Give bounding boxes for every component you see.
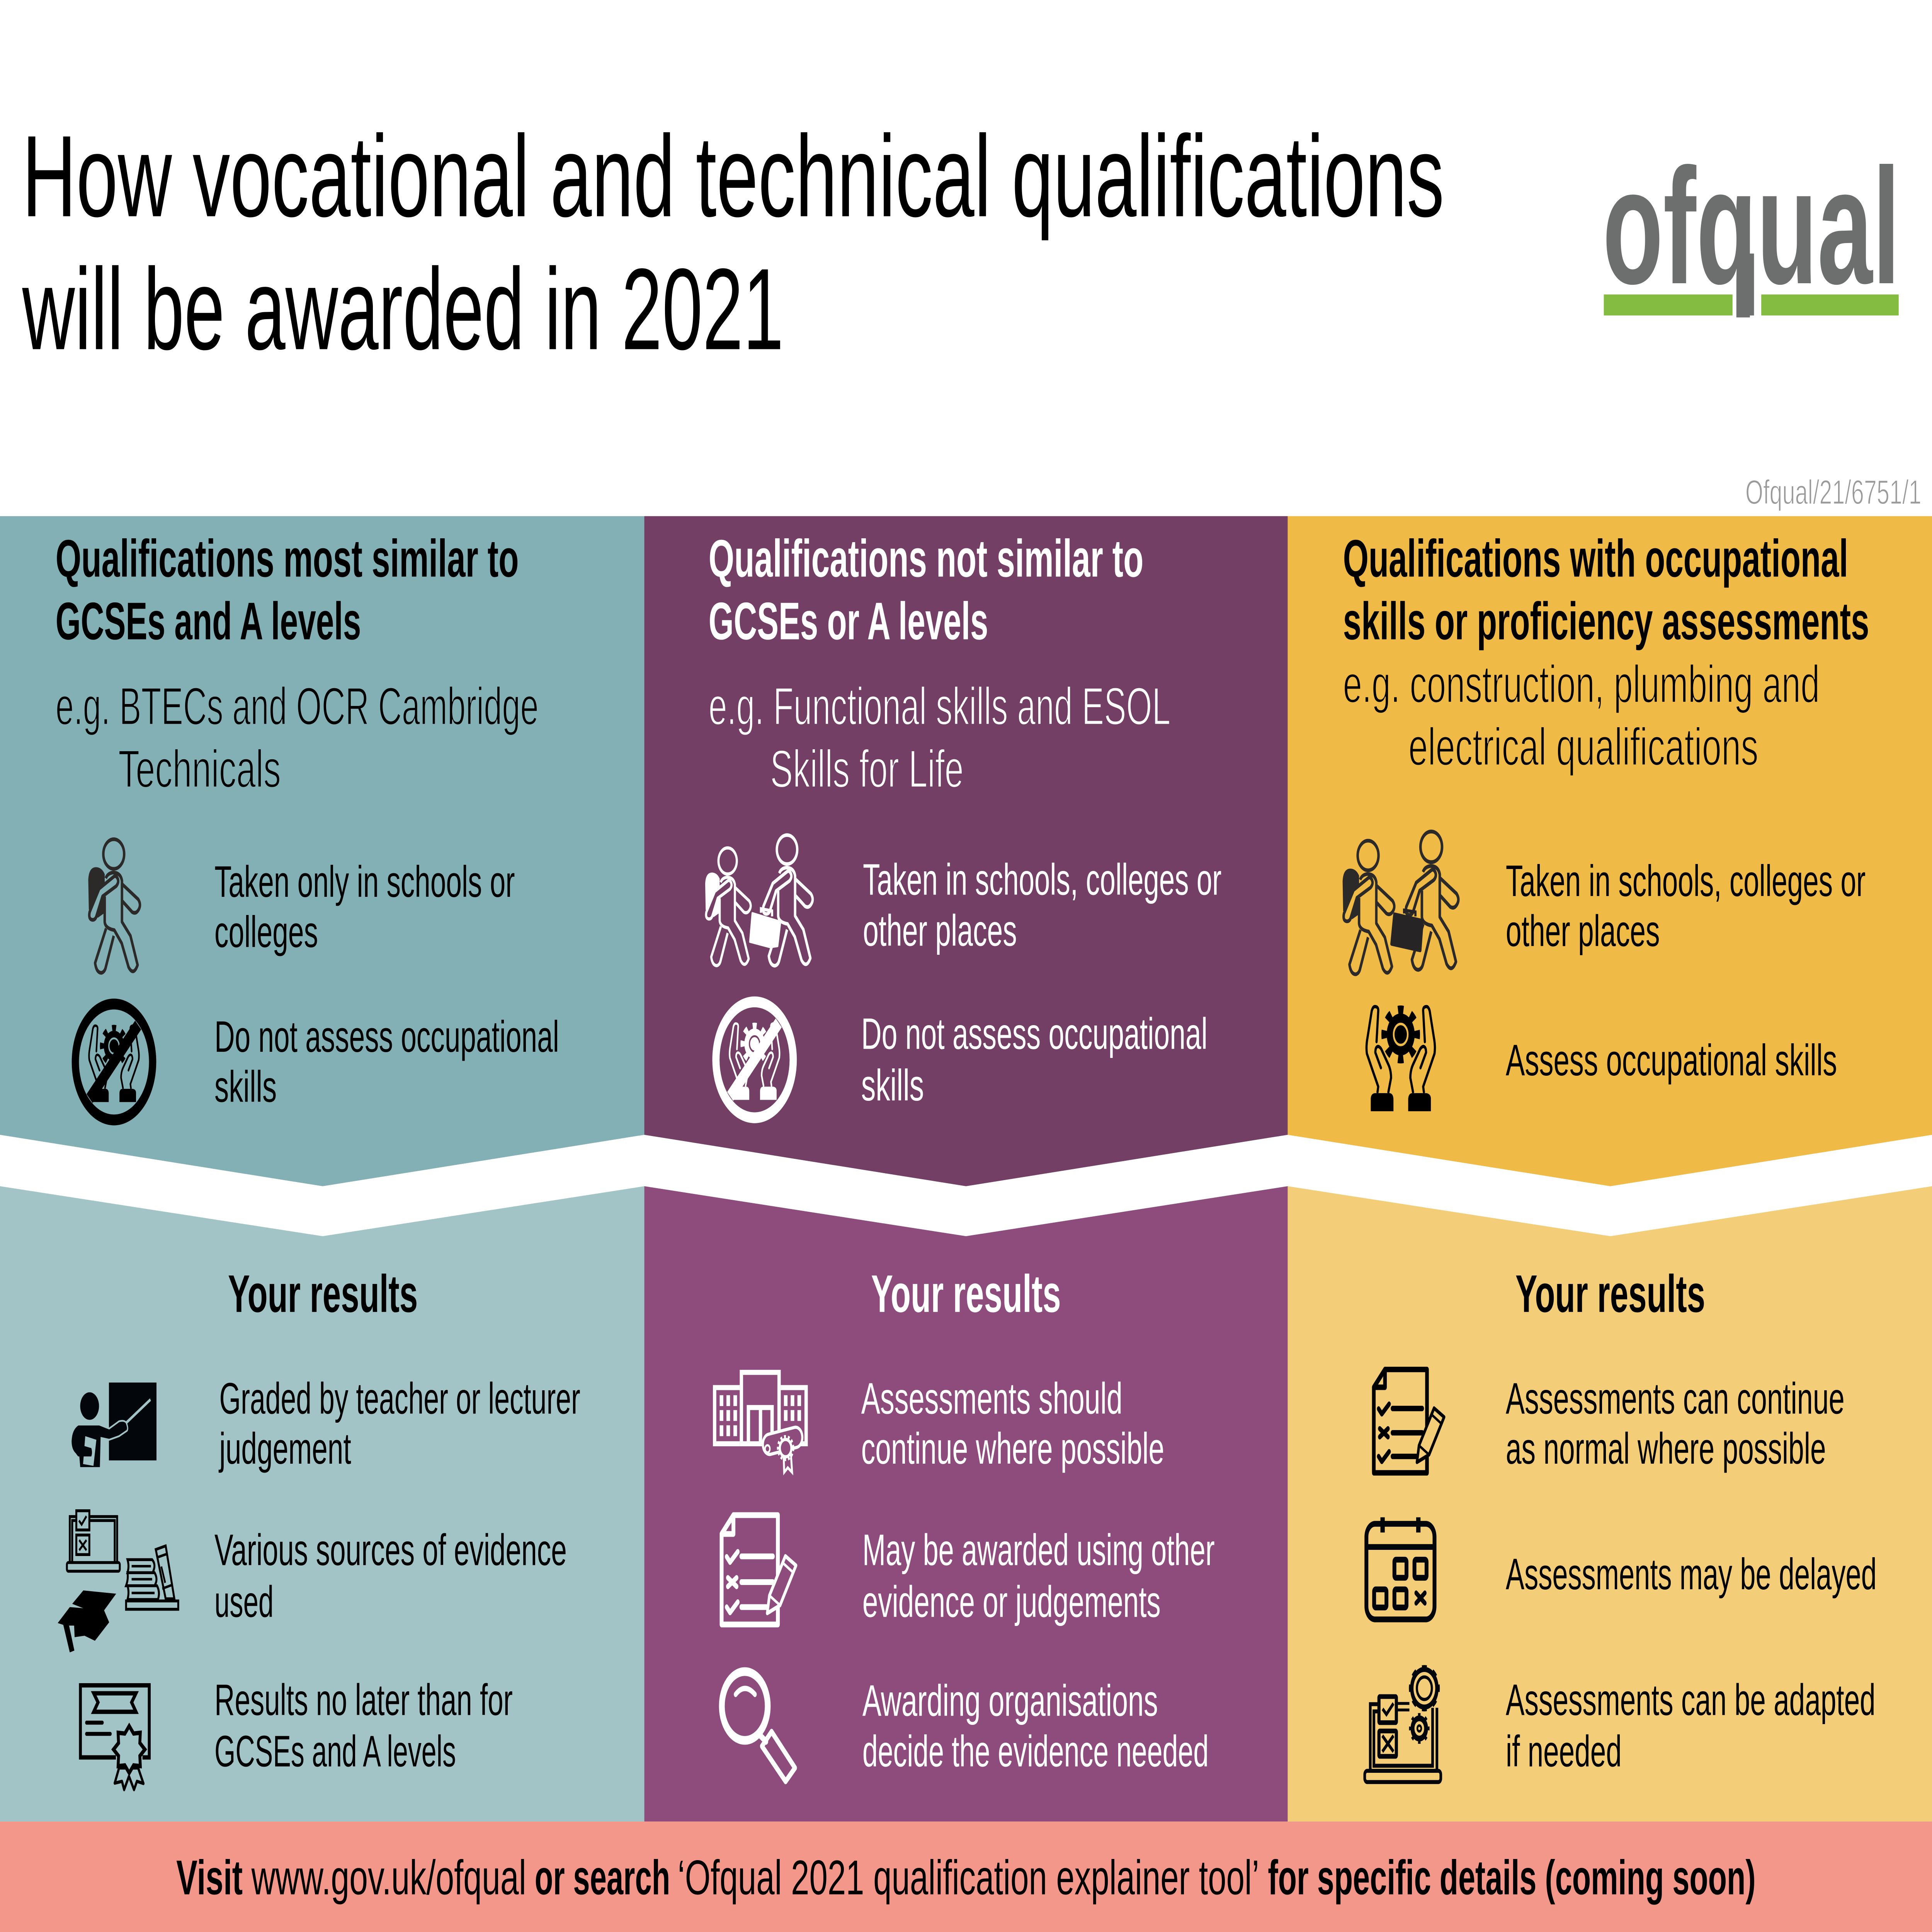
examples: column 1: Technicals (118, 739, 281, 798)
icon: laptop (67, 1511, 120, 1571)
text: results no later than (214, 1675, 513, 1776)
icon: calendar (1366, 1517, 1434, 1619)
text: taken in schools, colleges or other places (1506, 856, 1866, 956)
text: may be awarded: evidence or judgements (862, 1577, 1161, 1626)
text: taken in schools, colleges or other places: other places (863, 906, 1017, 955)
text: assessments can be adapted: Assessments can be adapted (1506, 1675, 1876, 1725)
icon: no occupational skills (716, 1002, 793, 1118)
heading: your results: Your results (1515, 1264, 1705, 1323)
text: results no later than: Results no later than for (214, 1675, 513, 1725)
heading: your results: Your results (871, 1264, 1061, 1323)
icon: student walking (88, 839, 140, 973)
text: awarding organisations: Awarding organisations (862, 1676, 1158, 1725)
text: graded by teacher (218, 1374, 580, 1473)
text: assess occupational skills: Assess occupational skills (1506, 1036, 1837, 1085)
title (22, 112, 1444, 374)
text: assessments should continue: Assessments should (861, 1374, 1122, 1423)
examples: column 3: electrical qualifications (1408, 717, 1759, 776)
text: awarding organisations (862, 1676, 1209, 1776)
icon: laptop with gears (1365, 1667, 1441, 1782)
heading: column 1: Qualifications most similar to (56, 529, 519, 588)
text: may be awarded: May be awarded using other (862, 1525, 1215, 1575)
text: assessments can continue: as normal where possible (1506, 1423, 1826, 1473)
title: will be awarded in 2021 (22, 245, 784, 374)
panel: qualifications most similar to GCSEs and A levels (0, 516, 645, 1186)
examples: column 3 (1343, 655, 1820, 776)
text: assessments can continue: Assessments can continue (1506, 1374, 1845, 1423)
panel: qualifications not similar to GCSEs or A levels (645, 516, 1287, 1186)
text: do not assess occupational skills (861, 1009, 1208, 1110)
footer text: Visit (176, 1850, 243, 1905)
text: assessments can be adapted (1506, 1675, 1876, 1776)
heading: column 3: Qualifications with occupational (1343, 529, 1848, 588)
examples: column 1 (56, 677, 539, 798)
text: assessments may be delayed: Assessments may be delayed (1506, 1549, 1877, 1599)
text: various sources of evidence: Various sources of evidence (214, 1525, 567, 1575)
panel: results column 1 (0, 1186, 645, 1821)
heading: your results: Your results (228, 1264, 418, 1323)
text: do not assess occupational skills: skills (861, 1060, 924, 1110)
examples: column 1: e.g. BTECs and OCR Cambridge (56, 677, 539, 736)
examples: column 2: Skills for Life (770, 739, 964, 798)
text: assessments can continue (1506, 1374, 1845, 1473)
text: taken in schools, colleges or other places: other places (1506, 906, 1660, 956)
icon: magnifying glass (722, 1672, 795, 1781)
footer text: ‘Ofqual 2021 qualification explainer tool’ (678, 1850, 1259, 1905)
text: taken in schools, colleges or other places: Taken in schools, colleges or (1506, 856, 1866, 906)
icon: hands holding gear (1366, 1007, 1435, 1111)
text: taken in schools, colleges or other places: Taken in schools, colleges or (863, 855, 1221, 904)
text: awarding organisations: decide the evidence needed (862, 1726, 1209, 1776)
examples: column 3: e.g. construction, plumbing and (1343, 655, 1820, 714)
heading: column 1: GCSEs and A levels (56, 592, 361, 651)
footer text: www.gov.uk/ofqual (251, 1850, 526, 1905)
logo: ofqual: ofqual (1603, 134, 1900, 319)
panel: qualifications with occupational skills or proficiency assessments (1287, 516, 1932, 1186)
icon: checklist and pencil (1374, 1369, 1444, 1473)
footer text: for specific details (coming soon) (1268, 1850, 1756, 1905)
text: do not assess occupational skills: Do not assess occupational (214, 1012, 559, 1061)
examples: column 2 (709, 677, 1170, 798)
heading: column 2: GCSEs or A levels (709, 592, 988, 651)
icon: college building with diploma (714, 1372, 806, 1472)
heading: column 3: skills or proficiency assessments (1343, 592, 1869, 651)
text: do not assess occupational skills: skills (214, 1062, 277, 1111)
panel: results column 3 (1287, 1186, 1932, 1821)
icon: checklist and pencil (722, 1515, 796, 1624)
heading: column 2 (709, 529, 1143, 651)
title: How vocational and technical qualifications (22, 112, 1444, 241)
icon: teacher at board (71, 1383, 156, 1468)
text: assessments should continue: continue where possible (861, 1423, 1164, 1473)
text: do not assess occupational skills (214, 1012, 559, 1111)
icon: books (126, 1546, 178, 1609)
icon: mortarboard (58, 1590, 116, 1652)
icon: student and worker walking (705, 835, 813, 966)
text: may be awarded (862, 1525, 1215, 1626)
text: graded by teacher: Graded by teacher or lecturer (219, 1374, 580, 1423)
heading: column 2: Qualifications not similar to (709, 529, 1143, 588)
panel: results column 2 (645, 1186, 1287, 1821)
text: results no later than: GCSEs and A levels (214, 1726, 456, 1776)
footer text: or search (535, 1850, 670, 1905)
heading: column 1 (56, 529, 519, 651)
footer text (176, 1850, 1756, 1905)
text: assessments can be adapted: if needed (1506, 1726, 1622, 1776)
examples: column 2: e.g. Functional skills and ESOL (709, 677, 1170, 736)
text: taken only in schools: Taken only in schools or (214, 857, 515, 906)
icon: certificate (80, 1685, 149, 1790)
text: various sources of evidence: used (214, 1577, 274, 1626)
icon: laptop, books and mortarboard (58, 1511, 178, 1652)
icon: no occupational skills (75, 1004, 153, 1120)
text: various sources of evidence (214, 1525, 567, 1626)
heading: column 3 (1343, 529, 1869, 651)
text: assessments should continue (861, 1374, 1164, 1473)
footer banner (0, 1821, 1932, 1932)
text: taken only in schools (214, 857, 515, 957)
text: graded by teacher: judgement (218, 1423, 351, 1473)
icon: student and worker walking (1343, 832, 1458, 974)
text: taken in schools, colleges or other places (863, 855, 1221, 955)
text: taken only in schools: colleges (214, 907, 318, 957)
text: do not assess occupational skills: Do not assess occupational (861, 1009, 1208, 1058)
reference number: Ofqual/21/6751/1 (1745, 473, 1921, 511)
